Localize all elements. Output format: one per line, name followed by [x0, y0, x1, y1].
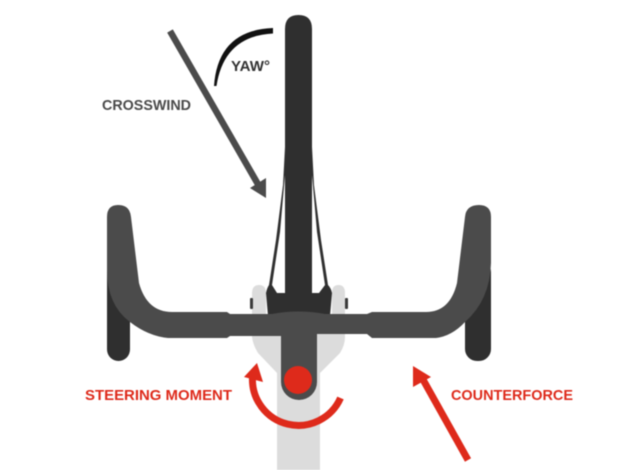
crosswind arrow [170, 31, 266, 198]
frame and fork silhouette [250, 285, 348, 470]
label: yaw: YAW° [231, 58, 270, 75]
left brake lever drop [107, 260, 130, 361]
label: counterforce: COUNTERFORCE [451, 387, 573, 404]
right brake lever drop [465, 260, 491, 361]
steering moment arrow [244, 363, 340, 425]
front wheel and fork blades [266, 15, 332, 316]
label: crosswind: CROSSWIND [102, 97, 191, 114]
handlebar [107, 205, 491, 400]
yaw angle arc [214, 28, 273, 86]
label: steering moment: STEERING MOMENT [85, 387, 232, 404]
counterforce arrow [413, 366, 468, 460]
steering axis pivot [284, 366, 312, 394]
